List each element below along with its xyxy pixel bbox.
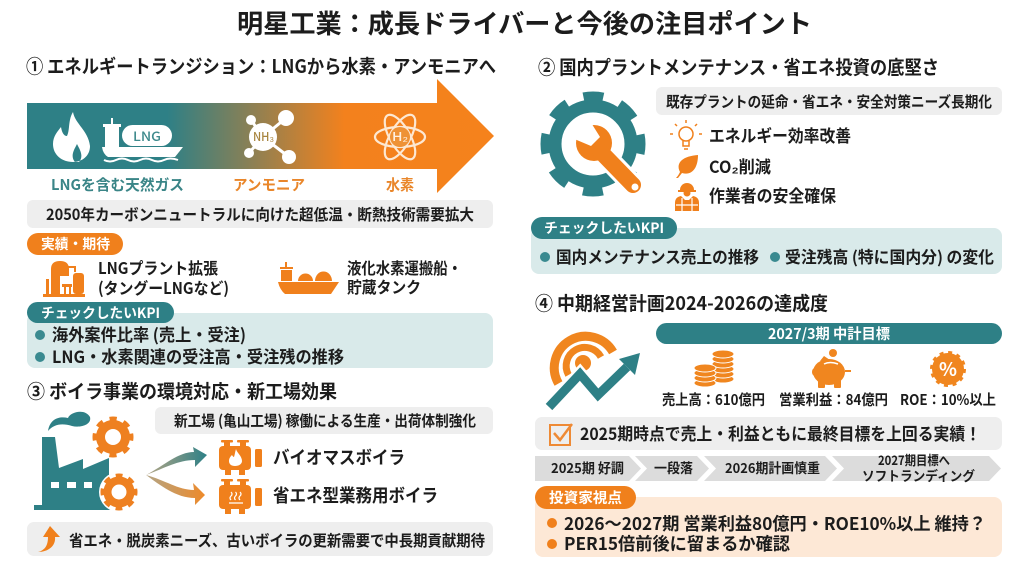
- title: 明星工業：成長ドライバーと今後の注目ポイント: [237, 4, 812, 41]
- badge: results and expectations: 実績・期待: [41, 234, 110, 254]
- label: hydrogen: 水素: [386, 174, 414, 195]
- text: energy efficiency: エネルギー効率改善: [709, 122, 851, 147]
- text: CO2 reduction: CO₂削減: [709, 153, 771, 178]
- callout: results above target: 2025期時点で売上・利益ともに最終目標を上回る実績！: [580, 420, 981, 445]
- icon: light bulb: [670, 120, 702, 149]
- panel: investor view: 2026～2027期 営業利益80億円・ROE10%以上 維持？: [564, 511, 986, 536]
- panel: KPI 1: 海外案件比率 (売上・受注): [52, 321, 246, 346]
- icon: flame: [53, 112, 90, 162]
- icon: factory with gears: [34, 412, 139, 512]
- timeline chevrons: ソフトランディング: [862, 465, 975, 485]
- panel: investor view: PER15倍前後に留まるか確認: [564, 531, 790, 556]
- panel: KPI 2: チェックしたいKPI: [544, 218, 664, 238]
- text: LNG plant expansion: LNGプラント拡張: [98, 255, 218, 279]
- icon: hydrogen carrier: [278, 262, 339, 294]
- panel: KPI 2: [531, 217, 1002, 274]
- panel: KPI 1: チェックしたいKPI: [41, 303, 160, 323]
- timeline chevrons: 一段落: [654, 457, 693, 477]
- callout: existing plants: 既存プラントの延命・省エネ・安全対策ニーズ長期化: [666, 91, 992, 112]
- timeline chevrons: 2025期 好調: [551, 457, 624, 477]
- metric: sales: 売上高：610億円: [662, 389, 765, 410]
- icon: ammonia molecule: [244, 110, 296, 164]
- panel: medium-term plan: [535, 289, 1002, 557]
- label: ammonia: アンモニア: [233, 174, 305, 195]
- icon: hydrogen atom: H₂: [392, 128, 408, 145]
- icon: safety worker: [675, 183, 699, 211]
- icon: LNG plant: [43, 261, 85, 297]
- callout: 2050 carbon neutral: 2050年カーボンニュートラルに向けた超低温・断熱技術需要拡大: [46, 203, 474, 225]
- icon: up arrow: [38, 526, 60, 552]
- banner: FY2027/3 target: 2027/3期 中計目標: [768, 323, 890, 344]
- text: biomass boiler: バイオマスボイラ: [273, 444, 405, 470]
- icon: coins: [694, 350, 734, 387]
- callout: existing plants: [656, 87, 1002, 115]
- callout: results above target: [535, 417, 1002, 450]
- panel: boiler business: [27, 377, 493, 556]
- text: hydrogen carrier and tank: 液化水素運搬船・: [347, 255, 462, 279]
- panel: investor view: [535, 486, 1002, 557]
- panel: KPI 2: 国内メンテナンス売上の推移: [556, 244, 759, 268]
- panel: domestic maintenance: [531, 53, 1002, 274]
- icon: biomass boiler: [219, 440, 262, 475]
- metric: operating profit: 営業利益：84億円: [779, 389, 888, 410]
- heading 2: ② 国内プラントメンテナンス・省エネ投資の底堅さ: [538, 53, 939, 80]
- panel: KPI 1: LNG・水素関連の受注高・受注残の推移: [52, 343, 344, 368]
- callout: new factory: 新工場 (亀山工場) 稼働による生産・出荷体制強化: [174, 410, 476, 431]
- badge: results and expectations: [27, 233, 123, 255]
- heading 3: ③ ボイラ事業の環境対応・新工場効果: [27, 377, 337, 404]
- icon: ROE percent badge: [932, 352, 964, 386]
- heading 1: ① エネルギートランジション：LNGから水素・アンモニアへ: [26, 52, 496, 79]
- text: energy-saving boiler: 省エネ型業務用ボイラ: [273, 482, 438, 508]
- timeline chevrons: 2027期目標へ: [878, 450, 950, 469]
- timeline chevrons: 2026期計画慎重: [725, 457, 820, 477]
- arrow: to commercial boiler: [146, 475, 205, 505]
- arrow: LNG to hydrogen transition: [27, 79, 494, 193]
- arrow: to biomass boiler: [146, 447, 207, 475]
- icon: gear and wrench: [545, 96, 641, 192]
- text: hydrogen carrier and tank: 貯蔵タンク: [347, 274, 421, 298]
- icon: energy-saving boiler: [219, 479, 262, 514]
- panel: KPI 1: [27, 302, 493, 368]
- icon: piggy bank: [812, 349, 851, 388]
- timeline chevrons: [535, 450, 1001, 485]
- metric: ROE: ROE：10%以上: [900, 389, 996, 410]
- callout: mid-term contribution: [27, 522, 493, 556]
- icon: leaf: [676, 155, 698, 178]
- heading 4: ④ 中期経営計画2024-2026の達成度: [535, 289, 828, 316]
- icon: LNG ship: LNG: [133, 126, 161, 145]
- icon: check box: [550, 424, 572, 445]
- icon: LNG ship: [102, 118, 183, 162]
- text: LNG plant expansion: (タングーLNGなど): [98, 275, 229, 299]
- icon: ammonia molecule: NH₃: [253, 128, 274, 145]
- callout: mid-term contribution: 省エネ・脱炭素ニーズ、古いボイラの更新需要で中長期貢献期待: [69, 529, 485, 551]
- banner: FY2027/3 target: [656, 323, 1002, 344]
- panel: energy transition: [26, 52, 496, 368]
- panel: KPI 2: 受注残高 (特に国内分) の変化: [785, 244, 994, 268]
- text: hydrogen carrier and tank: [347, 255, 462, 298]
- text: LNG plant expansion: [98, 255, 229, 299]
- text: worker safety: 作業者の安全確保: [709, 182, 836, 207]
- icon: hydrogen atom: [375, 110, 425, 164]
- icon: ROE percent badge: %: [939, 355, 957, 382]
- label: natural gas: LNGを含む天然ガス: [51, 174, 184, 195]
- panel: investor view: 投資家視点: [549, 487, 623, 508]
- icon: target with rising arrow: [549, 336, 640, 407]
